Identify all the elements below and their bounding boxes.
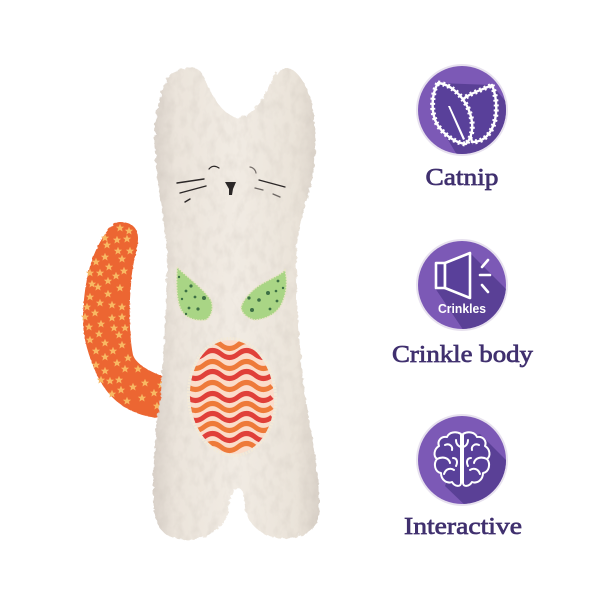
interactive label: Interactive xyxy=(404,514,522,540)
left whiskers xyxy=(177,179,206,202)
icon: speaker xyxy=(436,253,490,298)
feature: catnip xyxy=(416,64,508,190)
tail stars xyxy=(81,224,165,410)
icon: mint leaves xyxy=(433,83,496,144)
fluffy body xyxy=(150,60,325,545)
icon: brain xyxy=(435,432,489,486)
eyes xyxy=(209,166,256,173)
nose xyxy=(225,182,236,195)
catnip badge xyxy=(416,64,508,156)
interactive badge xyxy=(416,414,508,506)
right green leaf patch xyxy=(241,270,287,320)
catnip label: Catnip xyxy=(426,165,498,191)
right whiskers xyxy=(255,180,285,197)
left green leaf patch xyxy=(177,267,212,320)
striped belly patch xyxy=(187,338,277,457)
crinkles caption: Crinkles xyxy=(438,302,486,316)
feature: crinkle body xyxy=(392,239,533,368)
tail with star print xyxy=(81,222,167,418)
crinkles badge xyxy=(416,239,508,331)
embroidered cat face xyxy=(177,166,285,202)
plush cat toy xyxy=(81,60,325,545)
feature: interactive xyxy=(404,414,522,534)
crinkle body label: Crinkle body xyxy=(392,342,533,368)
